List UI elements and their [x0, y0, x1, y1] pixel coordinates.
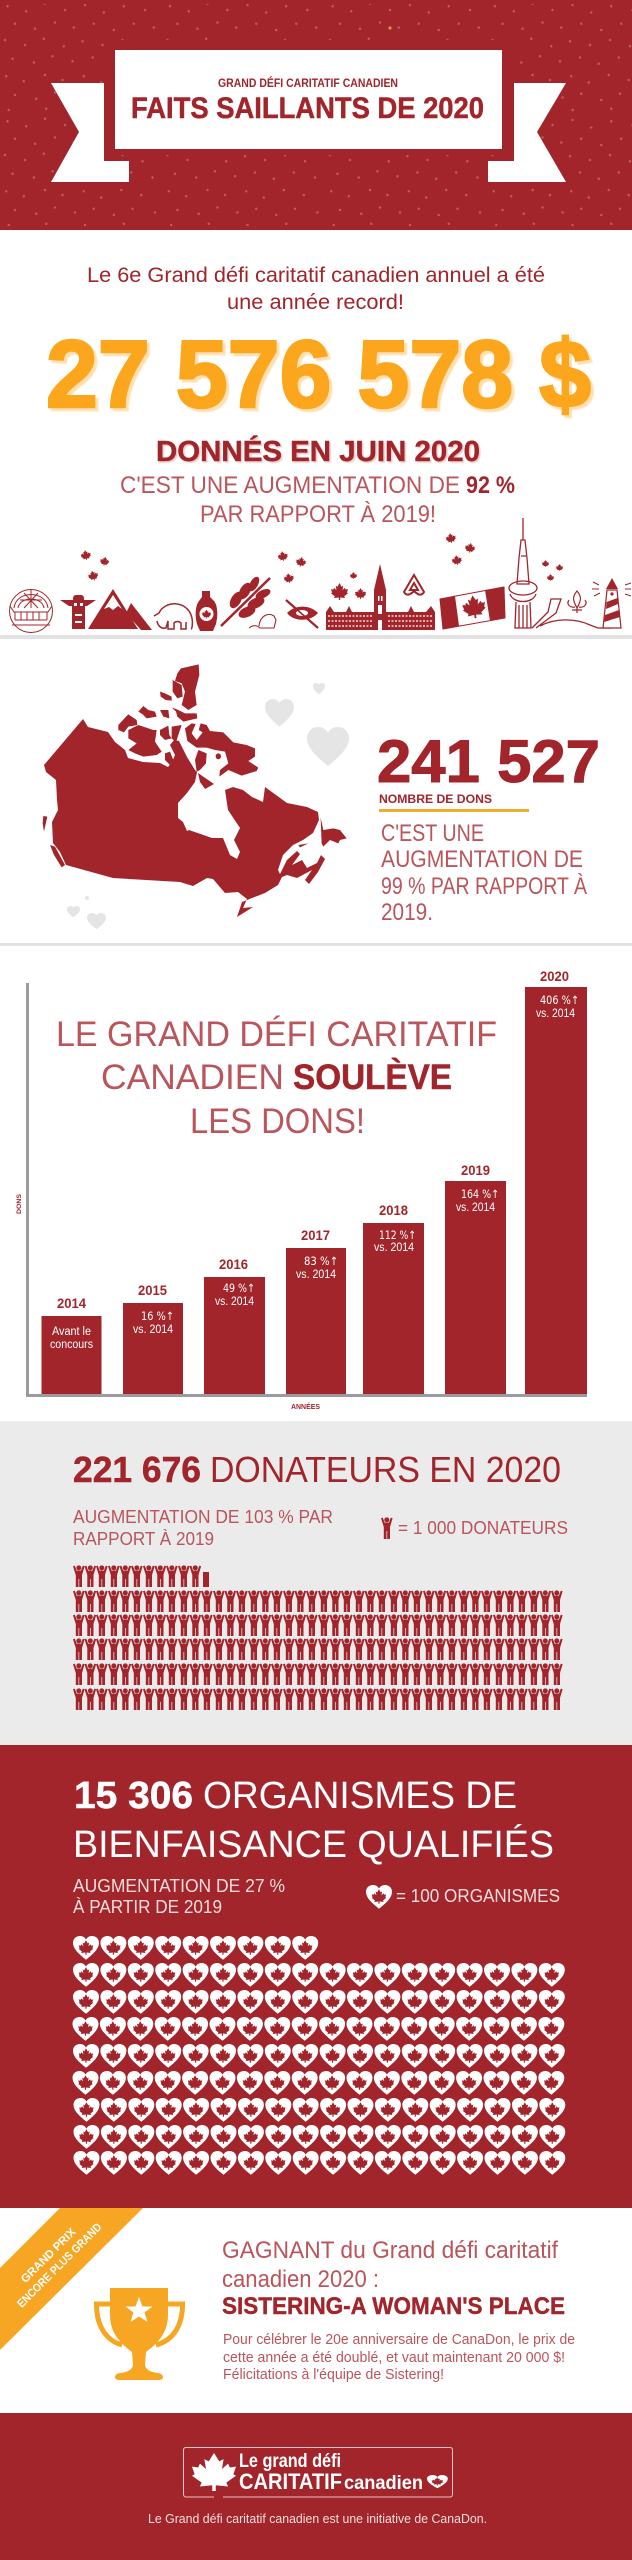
winner description: Félicitations à l'équipe de Sistering! [223, 2366, 444, 2383]
icon: trophy [96, 2288, 182, 2380]
icon: mountains [88, 589, 152, 630]
bar 2017: vs. 2014 [296, 1269, 337, 1281]
bar 2019 [445, 1162, 506, 1394]
panel: donors [0, 1421, 632, 1745]
chart title: SOULÈVE [293, 1057, 452, 1097]
panel: record total [0, 230, 632, 635]
subheading: DONNÉS EN JUIN 2020 [156, 434, 480, 468]
bar 2020: 2020 [540, 968, 569, 984]
icon: biosphere dome [10, 590, 52, 632]
bar 2016: 49 %↑ [223, 1281, 255, 1295]
winner heading: canadien 2020 : [222, 2266, 379, 2293]
bar 2014: 2014 [57, 1295, 86, 1311]
bar 2016 [204, 1256, 265, 1394]
increase text: 92 % [466, 472, 515, 499]
icon: polar bear [154, 604, 192, 629]
pictogram: charities [72, 1936, 565, 2175]
bar 2017: 83 %↑ [304, 1254, 338, 1268]
intro text [87, 264, 545, 314]
winner heading: GAGNANT du Grand défi caritatif [222, 2237, 558, 2264]
title plate [115, 50, 502, 149]
panel: header banner [0, 0, 632, 230]
increase text: À PARTIR DE 2019 [73, 1896, 222, 1917]
increase text: PAR RAPPORT À 2019! [200, 501, 436, 528]
icon: bridge and hill [532, 599, 612, 628]
panel: charities [0, 1745, 632, 2208]
bar 2014: Avant le [52, 1326, 91, 1338]
skyline of Canadian icons [10, 518, 631, 632]
icon: beaver [249, 614, 276, 628]
bar 2018 [363, 1202, 424, 1394]
ribbon tail: left [51, 83, 129, 182]
bar 2015: 16 %↑ [141, 1309, 174, 1323]
bar 2019: vs. 2014 [456, 1202, 496, 1214]
icon: wheat [221, 575, 272, 626]
stat: 241 527: 241 527 [377, 728, 600, 795]
icon: totem [60, 595, 96, 629]
heading [73, 1449, 561, 1490]
bar 2016: 2016 [219, 1256, 248, 1272]
bar 2018: 2018 [379, 1202, 408, 1218]
heading: 15 306 [74, 1775, 193, 1817]
panel: number of donations [0, 639, 632, 943]
increase text: AUGMENTATION DE [381, 846, 583, 873]
heading: ORGANISMES DE [203, 1775, 517, 1817]
increase text [73, 1875, 285, 1917]
map of Canada [43, 664, 347, 917]
chart title: CANADIEN [101, 1058, 284, 1097]
bar 2020: 406 %↑ [540, 993, 579, 1007]
panel: footer [0, 2413, 632, 2560]
bar 2015: vs. 2014 [133, 1324, 174, 1336]
corner ribbon: ENCORE PLUS GRAND [15, 2221, 104, 2310]
bar 2020: vs. 2014 [536, 1008, 576, 1020]
increase text: 99 % PAR RAPPORT À [381, 873, 587, 900]
icon: lighthouse [592, 578, 631, 628]
winner description: cette année a été doublé, et vaut maintenant 20 000 $! [223, 2349, 565, 2366]
increase text: AUGMENTATION DE 103 % PAR [73, 1506, 333, 1527]
intro text: une année record! [227, 291, 404, 314]
increase text: AUGMENTATION DE 27 % [73, 1875, 285, 1896]
icon: trillium [404, 575, 424, 595]
corner ribbon: GRAND PRIX [19, 2226, 79, 2286]
heading: BIENFAISANCE QUALIFIÉS [73, 1823, 554, 1866]
footnote: Le Grand défi caritatif canadien est une initiative de CanaDon. [148, 2511, 487, 2526]
increase text: C'EST UNE [381, 820, 484, 847]
panel: prize winner [0, 2208, 632, 2413]
bar 2019: 164 %↑ [461, 1187, 499, 1201]
corner ribbon [0, 2208, 143, 2350]
big amount: 27 576 578 $ [46, 321, 591, 428]
accent rule [379, 809, 529, 812]
bar 2018: vs. 2014 [374, 1242, 415, 1254]
label: number of donations: NOMBRE DE DONS [379, 794, 492, 806]
legend: one heart equals 100 charities: = 100 ORGANISMES [396, 1886, 560, 1906]
increase text [120, 472, 515, 528]
ribbon tail: right [488, 83, 566, 182]
bar 2020 [525, 968, 587, 1394]
increase text: 2019. [381, 899, 433, 926]
increase text [73, 1506, 333, 1549]
bar 2015: 2015 [138, 1282, 167, 1298]
chart title: LE GRAND DÉFI CARITATIF [56, 1015, 497, 1054]
panel: bar chart of donations [0, 946, 632, 1421]
axis label: annees: ANNÉES [291, 1402, 320, 1411]
icon: parliament [326, 564, 435, 630]
legend: one person equals 1000 donors: = 1 000 DONATEURS [398, 1517, 568, 1538]
ribbon fold shadows [104, 149, 514, 161]
heading [73, 1775, 554, 1866]
icon: CN Tower [509, 518, 537, 628]
logo: Le grand défi [239, 2451, 341, 2472]
bar 2017 [286, 1227, 346, 1394]
icon: falling maple leaves [80, 532, 563, 584]
bar 2015 [123, 1282, 183, 1394]
pictogram: donors [73, 1565, 563, 1710]
icon: maple syrup bottle [196, 591, 217, 631]
bar 2019: 2019 [461, 1162, 490, 1178]
title plate: FAITS SAILLANTS DE 2020 [131, 92, 484, 125]
axes [28, 983, 587, 1396]
icon: background hearts [67, 683, 349, 929]
axis label: dons: DONS [16, 1193, 23, 1214]
bar 2014 [42, 1295, 102, 1394]
icon: fleur-de-lis [568, 591, 586, 613]
bar 2016: vs. 2014 [215, 1296, 255, 1308]
intro text: Le 6e Grand défi caritatif canadien annuel a été [87, 264, 545, 287]
title plate: GRAND DÉFI CARITATIF CANADIEN [218, 77, 398, 90]
chart title [56, 1015, 497, 1141]
increase text: RAPPORT À 2019 [73, 1528, 214, 1549]
heading: DONATEURS EN 2020 [210, 1449, 561, 1490]
winner heading: SISTERING-A WOMAN'S PLACE [222, 2293, 565, 2320]
winner heading [222, 2237, 565, 2320]
chart title: LES DONS! [190, 1102, 365, 1141]
bar 2018: 112 %↑ [379, 1228, 416, 1242]
increase text [381, 820, 587, 926]
winner description [223, 2331, 575, 2383]
winner description: Pour célébrer le 20e anniversaire de CanaDon, le prix de [223, 2331, 575, 2348]
bar 2014: concours [50, 1339, 93, 1351]
bar 2017: 2017 [301, 1227, 330, 1243]
icon: canoe and paddle [286, 600, 318, 628]
increase text: C'EST UNE AUGMENTATION DE [120, 472, 460, 499]
icon: Canadian flag [440, 587, 505, 629]
icon: snowflakes [331, 572, 366, 600]
logo: canadien [344, 2473, 423, 2494]
heading: 221 676 [73, 1449, 201, 1490]
legend: one heart equals 100 charities [366, 1885, 560, 1909]
logo [184, 2448, 452, 2497]
logo: CARITATIF [239, 2469, 342, 2494]
